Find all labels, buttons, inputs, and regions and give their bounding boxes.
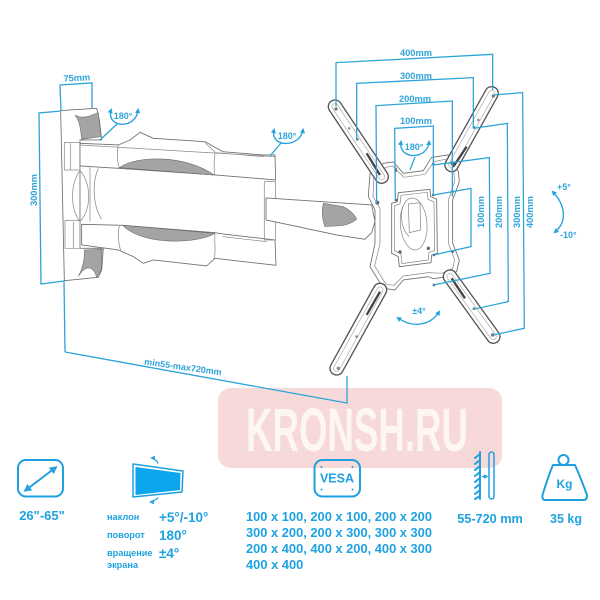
- upper arm mesh: [119, 159, 214, 175]
- tilt and rotation specs: ±4°: [159, 546, 179, 561]
- arm: top left: [334, 107, 382, 177]
- label: weight: 35 kg: [550, 512, 582, 526]
- upper arm: [80, 132, 276, 180]
- VESA width labels: 100mm: [400, 116, 432, 126]
- tilt and rotation specs: [107, 510, 208, 570]
- mounting plate: [368, 155, 459, 290]
- top mesh pad: [75, 113, 101, 139]
- central square inner: [395, 192, 435, 264]
- VESA sizes list: 100 x 100, 200 x 100, 200 x 200: [246, 509, 432, 524]
- plate holes: [375, 161, 454, 286]
- upper arm detail lines: [80, 142, 275, 175]
- arm: top right: [452, 93, 495, 167]
- tilt and rotation specs: 180°: [159, 528, 187, 543]
- icon: screen size: [18, 460, 63, 496]
- tilt and rotation specs: поворот: [107, 530, 145, 540]
- icon: tilting screen: [133, 458, 183, 502]
- wall mount arm drawing: [61, 108, 276, 281]
- tilt callout: +5 / -10: +5°: [557, 182, 571, 192]
- label: screen size: 26"-65": [19, 508, 65, 523]
- reach dimension: min55-max720mm: min55-max720mm: [144, 357, 222, 377]
- icon: weight: [542, 455, 587, 500]
- VESA height labels: 200mm: [494, 196, 504, 228]
- wall plate: [61, 108, 103, 281]
- wall plate dimensions: 75mm and 300mm: 75mm: [63, 72, 91, 84]
- arm: bottom left: [337, 290, 380, 370]
- icon: VESA: VESA: [320, 472, 354, 486]
- VESA sizes list: 300 x 200, 200 x 300, 300 x 300: [246, 525, 432, 540]
- VESA height labels: 100mm: [476, 196, 486, 228]
- watermark: KRONSH.RU: [218, 388, 502, 468]
- VESA sizes list: [246, 509, 432, 572]
- elbow joint: [264, 182, 276, 240]
- lower arm: [82, 224, 276, 266]
- wall plate dimensions: 75mm and 300mm: 300mm: [29, 174, 39, 206]
- rotation callout: screen rotation 4: [398, 306, 439, 324]
- extension arm: [266, 198, 375, 239]
- tilt and rotation specs: вращение: [107, 548, 153, 558]
- lower arm detail lines: [118, 226, 267, 266]
- central oval detail: [401, 203, 421, 237]
- rotation callout: plate 180: 180°: [405, 142, 424, 152]
- arm: bottom right: [450, 277, 494, 337]
- VESA width labels: 400mm: [400, 48, 432, 58]
- tilt and rotation specs: экрана: [107, 560, 139, 570]
- rotation callout: wall joint 180: [100, 110, 138, 140]
- reach dimension: min55-max720mm: [65, 352, 347, 403]
- plate inner contour: [373, 159, 455, 285]
- VESA width labels: 200mm: [399, 94, 431, 104]
- rotation callout: elbow joint 180: 180°: [278, 131, 297, 141]
- icon: wall distance: [475, 452, 494, 499]
- central square: [392, 189, 437, 267]
- rotation callout: plate 180: [401, 142, 429, 170]
- spine ovals: [72, 167, 102, 222]
- wall bracket spine: [64, 143, 80, 248]
- bottom mesh pad: [78, 249, 102, 277]
- VESA width labels: [399, 48, 432, 126]
- VESA height labels: [476, 196, 535, 228]
- VESA height labels: 400mm: [525, 196, 535, 228]
- VESA sizes list: 400 x 400: [246, 557, 303, 572]
- rotation callout: screen rotation 4: ±4°: [412, 306, 426, 316]
- rotation callout: elbow joint 180: [270, 130, 303, 156]
- tilt and rotation specs: +5°/-10°: [159, 510, 208, 525]
- wall plate dimensions: 75mm and 300mm: [29, 72, 92, 352]
- VESA height labels: 300mm: [512, 196, 522, 228]
- tilt and rotation specs: наклон: [107, 512, 139, 522]
- tilt callout: +5 / -10: -10°: [560, 230, 577, 240]
- VESA width labels: 300mm: [400, 71, 432, 81]
- central oval: [399, 197, 429, 251]
- rotation callout: wall joint 180: 180°: [114, 111, 133, 121]
- lower arm mesh: [123, 225, 215, 241]
- icon: weight: Kg: [556, 477, 572, 491]
- label: wall distance: 55-720 mm: [457, 512, 523, 526]
- tilt callout: +5 / -10: [553, 182, 577, 240]
- VESA width dimensions: [336, 54, 524, 335]
- VESA sizes list: 200 x 400, 400 x 200, 400 x 300: [246, 541, 432, 556]
- TV plate drawing: [266, 93, 495, 370]
- arm mesh: [322, 203, 357, 227]
- icon: VESA: [314, 460, 360, 496]
